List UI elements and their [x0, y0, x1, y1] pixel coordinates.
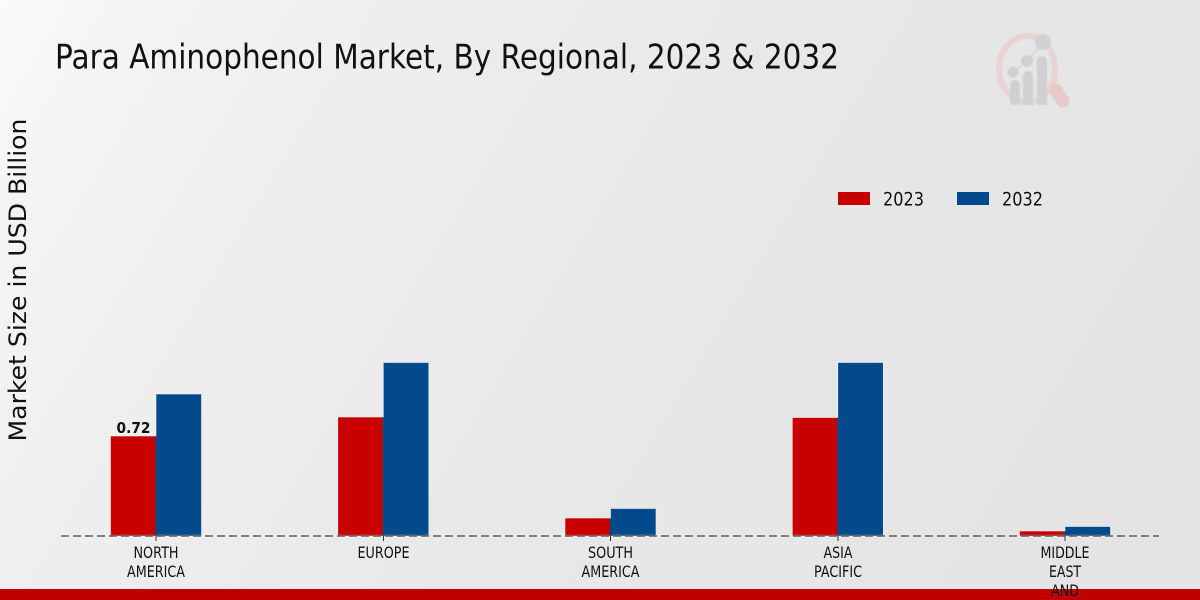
category labels: ASIA [824, 543, 853, 562]
category labels: AMERICA [582, 562, 640, 581]
category label: Middle East and Africa: EAST [1049, 562, 1081, 581]
icon: watermark logo [999, 34, 1063, 105]
category labels: NORTH [134, 543, 178, 562]
legend [838, 188, 1043, 210]
baseline [61, 536, 1159, 541]
category label: Middle East and Africa: MIDDLE [1040, 543, 1090, 562]
bars: North America [110, 394, 202, 536]
bars: Middle East and Africa [1020, 526, 1110, 536]
category labels: AMERICA [127, 562, 185, 581]
y axis label: Market Size in USD Billion [4, 118, 32, 442]
category label: Middle East and Africa: AND [1051, 581, 1079, 600]
legend: 2023 [883, 188, 924, 210]
category label: Middle East and Africa [1040, 543, 1090, 600]
value label: 0.72 [116, 419, 150, 437]
category labels: PACIFIC [814, 562, 862, 581]
category labels [127, 543, 862, 581]
bars: South America [565, 508, 656, 536]
bars: Europe [338, 362, 429, 536]
legend: 2032 [1002, 188, 1043, 210]
bar chart [61, 362, 1159, 541]
title: Para Aminophenol Market, By Regional, 2023 & 2032 [55, 38, 839, 78]
footer bar [0, 589, 1200, 600]
bars: Asia Pacific [792, 362, 883, 536]
category labels: EUROPE [358, 543, 410, 562]
category labels: SOUTH [588, 543, 633, 562]
